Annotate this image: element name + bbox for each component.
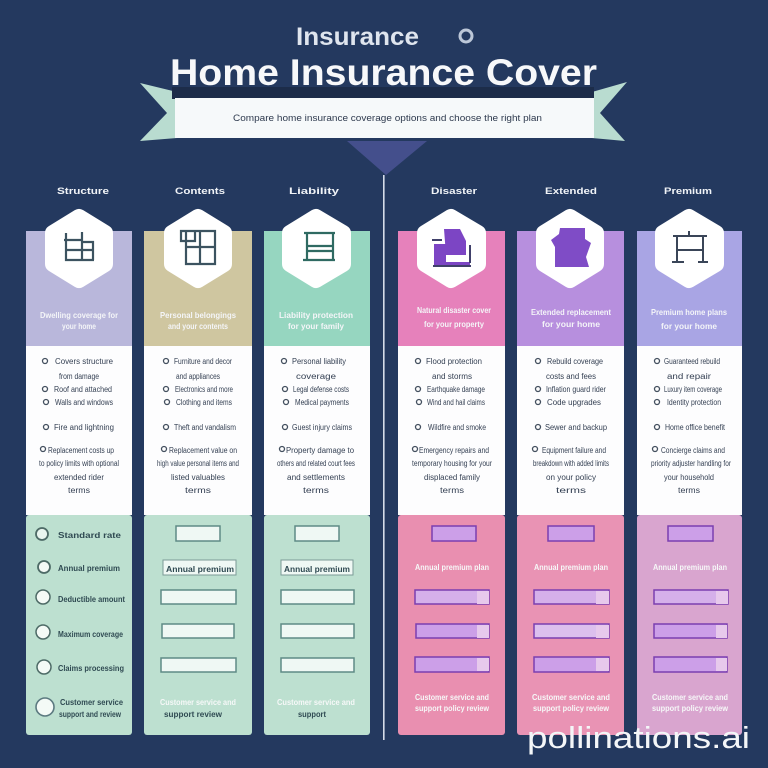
footer boxes: support xyxy=(298,709,326,719)
footer band xyxy=(517,515,624,735)
column labels: Liability xyxy=(289,186,339,196)
header text: Personal belongings xyxy=(160,310,236,320)
panel: column 5 xyxy=(517,217,624,735)
banner subtitle: Compare home insurance coverage options and choose the right plan xyxy=(233,113,542,123)
feature list: others and related court fees xyxy=(277,459,355,468)
feature list xyxy=(412,357,492,495)
feature list: listed valuables xyxy=(171,473,225,482)
footer boxes: Annual premium xyxy=(284,564,350,574)
feature list: Property damage to xyxy=(286,446,355,455)
feature list: and appliances xyxy=(176,372,220,381)
footer band xyxy=(144,515,252,735)
kicker heading xyxy=(296,23,472,51)
title: Home Insurance Cover xyxy=(170,52,597,93)
footer rows: Annual premium xyxy=(58,563,120,573)
footer boxes: Annual premium plan xyxy=(415,562,489,572)
header text xyxy=(531,307,611,329)
kicker heading: Insurance xyxy=(296,23,419,51)
footer band xyxy=(26,515,132,735)
feature list: Luxury item coverage xyxy=(664,385,722,394)
header text: for your home xyxy=(542,319,600,329)
panel: column 1 xyxy=(26,217,132,735)
header text: Natural disaster cover xyxy=(417,305,492,315)
feature list: Personal liability xyxy=(292,357,346,366)
icon: house badge xyxy=(53,217,105,280)
feature list: Rebuild coverage xyxy=(547,357,603,366)
footer boxes xyxy=(532,526,610,713)
footer rows: Deductible amount xyxy=(58,594,125,604)
feature list: Replacement costs up xyxy=(48,446,114,455)
footer band xyxy=(264,515,370,735)
column labels: Contents xyxy=(175,186,225,196)
header band xyxy=(398,231,505,346)
panel: column 2 xyxy=(144,217,252,735)
feature list: Wind and hail claims xyxy=(427,398,485,407)
footer boxes xyxy=(160,526,236,719)
header text: Premium home plans xyxy=(651,307,727,317)
body xyxy=(398,346,505,515)
body xyxy=(264,346,370,515)
column labels xyxy=(57,186,712,196)
feature list: Roof and attached xyxy=(54,385,112,394)
feature list: from damage xyxy=(59,372,99,381)
feature list: Identity protection xyxy=(667,398,721,407)
column labels: Structure xyxy=(57,186,109,196)
feature list xyxy=(532,357,609,495)
body xyxy=(517,346,624,515)
feature list: Code upgrades xyxy=(547,398,601,407)
footer boxes: Customer service and xyxy=(532,692,610,702)
feature list: Covers structure xyxy=(55,357,114,366)
panel: column 4 xyxy=(398,217,505,735)
header text xyxy=(40,310,119,331)
body xyxy=(637,346,742,515)
header text: for your family xyxy=(288,321,344,331)
header text xyxy=(160,310,236,331)
feature list: your household xyxy=(664,473,714,482)
footer rows: Standard rate xyxy=(58,530,121,540)
feature list: Wildfire and smoke xyxy=(428,423,486,432)
icon: house badge xyxy=(172,217,224,280)
footer boxes: support policy review xyxy=(652,703,728,713)
feature list: Replacement value on xyxy=(169,446,237,455)
footer rows: Claims processing xyxy=(58,663,124,673)
feature list: terms xyxy=(556,486,586,495)
footer boxes xyxy=(415,526,489,713)
feature list: Theft and vandalism xyxy=(174,423,236,432)
feature list: Home office benefit xyxy=(665,423,726,432)
feature list: temporary housing for your xyxy=(412,459,492,468)
feature list: Guaranteed rebuild xyxy=(664,357,720,366)
feature list: Concierge claims and xyxy=(661,446,725,455)
panel: column 6 xyxy=(637,217,742,735)
feature list: and storms xyxy=(432,372,472,381)
feature list: and settlements xyxy=(287,473,345,482)
feature list: Walls and windows xyxy=(55,398,113,407)
center pointer triangle xyxy=(347,141,427,175)
feature list: Furniture and decor xyxy=(174,357,232,366)
feature list xyxy=(157,357,239,495)
panel: column 3 xyxy=(264,217,370,735)
feature list: terms xyxy=(303,486,329,495)
feature list: Clothing and items xyxy=(176,398,232,407)
header band xyxy=(637,231,742,346)
header text: Extended replacement xyxy=(531,307,611,317)
footer boxes: support review xyxy=(164,709,222,719)
feature list: breakdown with added limits xyxy=(533,459,609,468)
header text: and your contents xyxy=(168,321,228,331)
header band xyxy=(144,231,252,346)
header text: your home xyxy=(62,321,96,331)
feature list: displaced family xyxy=(424,473,480,482)
feature list: Legal defense costs xyxy=(293,385,349,394)
feature list: Fire and lightning xyxy=(54,423,114,432)
feature list xyxy=(277,357,355,495)
footer boxes: Annual premium xyxy=(166,564,234,574)
body xyxy=(144,346,252,515)
feature list: Emergency repairs and xyxy=(419,446,489,455)
feature list xyxy=(651,357,731,495)
feature list: Guest injury claims xyxy=(292,423,352,432)
footer boxes: support policy review xyxy=(415,703,489,713)
column labels: Extended xyxy=(545,186,597,196)
icon: house badge xyxy=(663,217,716,280)
header text: Dwelling coverage for xyxy=(40,310,119,320)
header text xyxy=(417,305,492,329)
footer rows: Maximum coverage xyxy=(58,629,123,639)
footer boxes xyxy=(277,526,355,719)
feature list: costs and fees xyxy=(546,372,596,381)
center divider line xyxy=(383,175,385,740)
feature list: to policy limits with optional xyxy=(39,459,119,468)
icon: house badge xyxy=(425,217,478,280)
footer boxes: Customer service and xyxy=(415,692,489,702)
feature list: high value personal items and xyxy=(157,459,239,468)
feature list: priority adjuster handling for xyxy=(651,459,731,468)
footer boxes: Annual premium plan xyxy=(534,562,608,572)
feature list: terms xyxy=(68,486,90,495)
header text: for your property xyxy=(424,319,484,329)
feature list: Flood protection xyxy=(426,357,482,366)
header text xyxy=(651,307,727,331)
header band xyxy=(517,231,624,346)
feature list: terms xyxy=(185,486,211,495)
header band xyxy=(26,231,132,346)
footer rows: Customer service xyxy=(60,697,123,707)
feature list xyxy=(39,357,119,495)
icon: house badge xyxy=(290,217,343,280)
footer rows: support and review xyxy=(59,709,121,719)
feature list: Inflation guard rider xyxy=(546,385,606,394)
footer boxes: support policy review xyxy=(533,703,609,713)
footer boxes: Annual premium plan xyxy=(653,562,727,572)
header band xyxy=(264,231,370,346)
footer boxes: Customer service and xyxy=(652,692,728,702)
header text: for your home xyxy=(661,321,717,331)
feature list: Earthquake damage xyxy=(427,385,485,394)
icon: house badge xyxy=(544,217,596,280)
feature list: extended rider xyxy=(54,473,104,482)
feature list: terms xyxy=(678,486,700,495)
footer band xyxy=(637,515,742,735)
footer boxes: Customer service and xyxy=(277,697,355,707)
footer rows xyxy=(36,528,125,719)
feature list: Medical payments xyxy=(295,398,349,407)
feature list: Electronics and more xyxy=(175,385,233,394)
header text: Liability protection xyxy=(279,310,353,320)
feature list: Equipment failure and xyxy=(542,446,606,455)
body xyxy=(26,346,132,515)
feature list: coverage xyxy=(296,372,337,381)
feature list: terms xyxy=(440,486,464,495)
watermark: pollinations.ai xyxy=(527,720,750,755)
feature list: and repair xyxy=(667,372,711,381)
header text xyxy=(279,310,353,331)
footer boxes: Customer service and xyxy=(160,697,236,707)
footer band xyxy=(398,515,505,735)
feature list: on your policy xyxy=(546,473,596,482)
column labels: Disaster xyxy=(431,186,478,196)
column labels: Premium xyxy=(664,186,712,196)
feature list: Sewer and backup xyxy=(545,423,608,432)
ribbon banner xyxy=(140,82,627,141)
footer boxes xyxy=(652,526,728,713)
